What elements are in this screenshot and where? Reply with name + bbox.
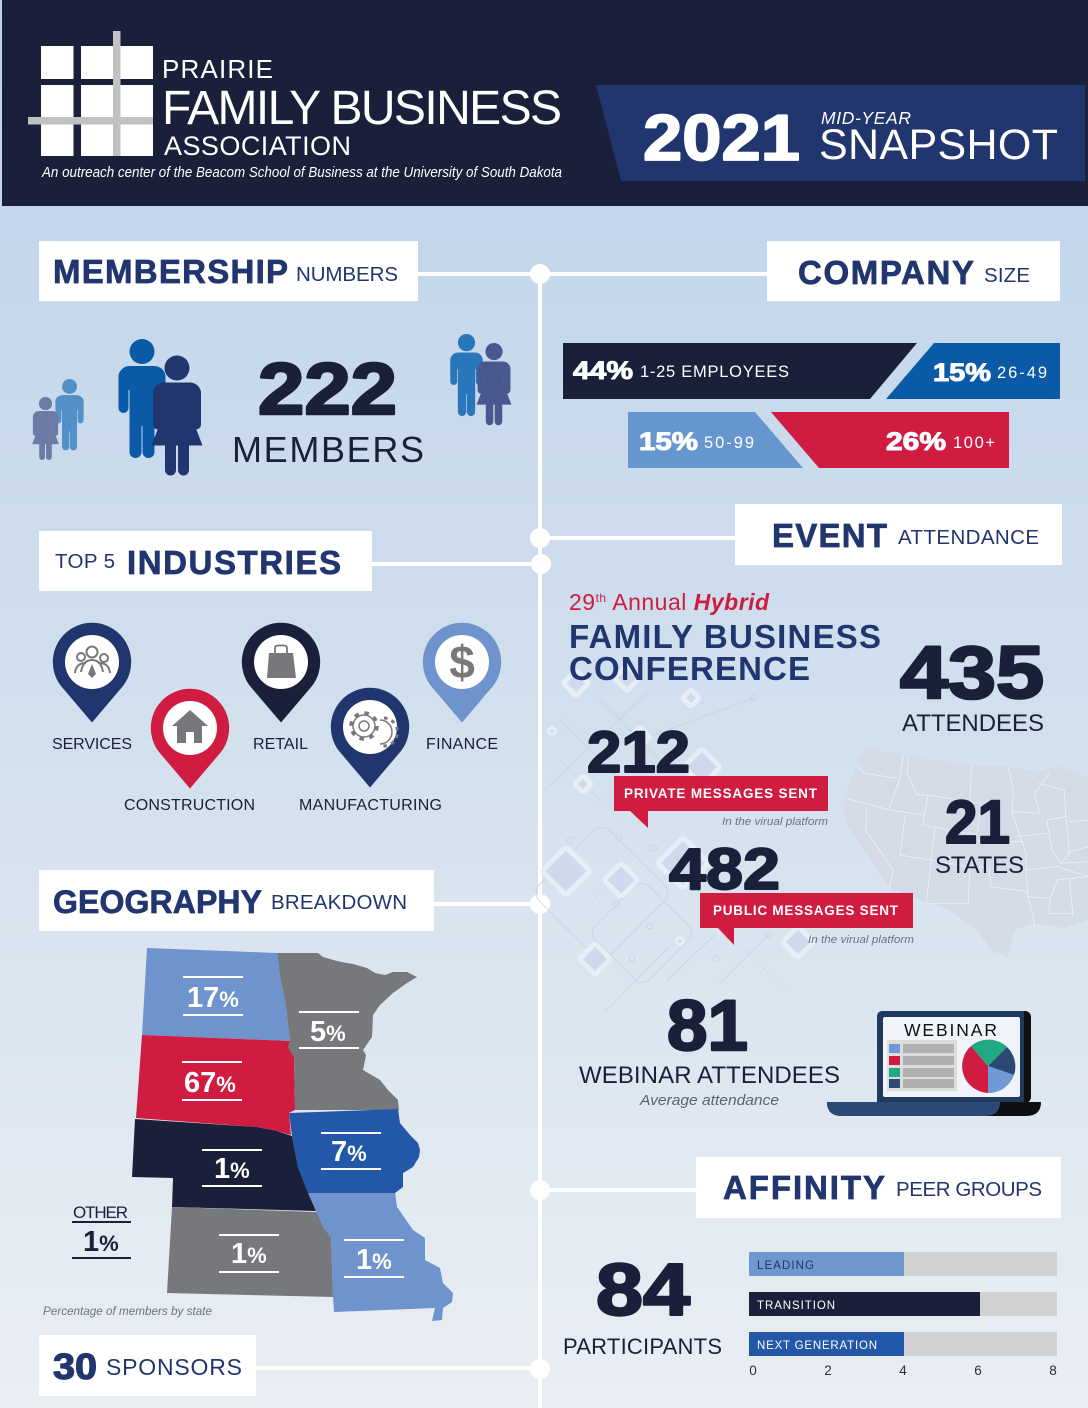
state: Missouri xyxy=(308,1192,453,1321)
bar: 50-99 employees: 50-99 xyxy=(704,434,754,452)
stat: public messages: In the virual platform xyxy=(808,934,914,946)
conference title xyxy=(569,589,881,687)
stat: webinar attendees: 81 xyxy=(667,987,748,1066)
heading: geography breakdown xyxy=(39,870,434,931)
state: Missouri: 1% xyxy=(356,1244,392,1276)
stat: public messages xyxy=(669,837,914,946)
bar: 1-25 employees xyxy=(563,343,917,399)
state: Iowa: 7% xyxy=(331,1136,367,1168)
state: Kansas xyxy=(167,1207,333,1297)
members count xyxy=(232,349,424,470)
bar chart: affinity groups: 2 xyxy=(824,1363,832,1378)
icon: services pin: SERVICES xyxy=(52,736,132,753)
map caption: Percentage of members by state xyxy=(43,1306,212,1318)
stat: webinar attendees xyxy=(579,987,840,1109)
attendee count xyxy=(900,631,1044,737)
state: North Dakota: 17% xyxy=(187,982,239,1014)
state: South Dakota: 67% xyxy=(184,1067,236,1099)
states stat: 21 xyxy=(945,788,1010,856)
icon: finance pin: $ xyxy=(449,636,475,688)
bar chart: affinity groups: LEADING xyxy=(757,1260,814,1272)
conference title: FAMILY BUSINESS xyxy=(569,618,881,655)
bar: 100+ employees: 26% xyxy=(886,428,946,456)
snapshot banner: SNAPSHOT xyxy=(819,121,1058,169)
bar: 1-25 employees: 44% xyxy=(573,357,633,385)
bar chart: affinity groups: TRANSITION xyxy=(757,1300,835,1312)
icon: medium family right xyxy=(450,334,511,425)
state: Minnesota xyxy=(277,953,417,1110)
heading: top 5 industries xyxy=(39,531,372,591)
bar chart: affinity groups: NEXT GENERATION xyxy=(757,1340,877,1352)
members panel xyxy=(32,334,511,476)
heading: affinity peer groups: PEER GROUPS xyxy=(896,1178,1042,1201)
heading: geography breakdown: BREAKDOWN xyxy=(271,891,407,914)
bar: 26-49 employees: 15% xyxy=(933,359,991,387)
bar: 50-99 employees xyxy=(628,412,803,468)
heading: event attendance xyxy=(735,504,1062,565)
stat: private messages xyxy=(587,720,828,828)
icon: webinar laptop: WEBINAR xyxy=(904,1020,997,1040)
bar chart: affinity groups: 8 xyxy=(1049,1363,1057,1378)
members count: MEMBERS xyxy=(232,429,424,470)
conference title: th xyxy=(596,591,607,605)
icon: small family left xyxy=(32,379,84,460)
stat: public messages: 482 xyxy=(669,837,780,902)
stat: participants xyxy=(563,1250,722,1359)
logo mark xyxy=(28,31,153,156)
sponsors box xyxy=(39,1335,256,1396)
heading: top 5 industries: TOP 5 xyxy=(55,550,115,573)
bar: 26-49 employees xyxy=(886,343,1060,399)
state: North Dakota xyxy=(142,948,290,1041)
bar chart: affinity groups: 4 xyxy=(899,1363,907,1378)
bar chart: affinity groups: 0 xyxy=(749,1363,757,1378)
heading: company size xyxy=(767,241,1060,301)
map: states by member share xyxy=(132,948,453,1321)
snapshot banner xyxy=(596,85,1085,181)
icon: finance pin xyxy=(423,623,501,753)
icon: manufacturing pin xyxy=(299,688,442,814)
organisation name: ASSOCIATION xyxy=(164,131,351,161)
bar: 50-99 employees: 15% xyxy=(639,428,698,456)
heading: membership numbers: MEMBERSHIP xyxy=(53,253,288,290)
states stat: STATES xyxy=(935,852,1024,879)
snapshot banner: MID-YEAR xyxy=(821,108,911,128)
stat: private messages: PRIVATE MESSAGES SENT xyxy=(624,786,818,801)
icon: finance pin: FINANCE xyxy=(426,736,498,753)
industries pins xyxy=(52,623,501,814)
heading: geography breakdown: GEOGRAPHY xyxy=(53,884,262,920)
organisation name: An outreach center of the Beacom School of Business at the University of South Dakota xyxy=(41,164,562,181)
conference title: Annual xyxy=(607,589,694,615)
attendee count: ATTENDEES xyxy=(902,710,1044,737)
heading: company size: SIZE xyxy=(984,264,1030,287)
header band xyxy=(2,0,1088,206)
heading: affinity peer groups: AFFINITY xyxy=(723,1169,885,1206)
stat: participants: PARTICIPANTS xyxy=(563,1334,722,1359)
heading: top 5 industries: INDUSTRIES xyxy=(127,544,341,581)
conference title: Hybrid xyxy=(694,589,770,615)
icon: retail pin xyxy=(242,623,320,753)
members count: 222 xyxy=(258,349,397,430)
other states callout: OTHER xyxy=(73,1203,128,1222)
conference title: CONFERENCE xyxy=(569,650,810,687)
other states callout: 1% xyxy=(83,1226,119,1258)
stat: webinar attendees: WEBINAR ATTENDEES xyxy=(579,1062,840,1089)
state: Kansas: 1% xyxy=(231,1238,267,1270)
organisation name: PRAIRIE xyxy=(162,54,273,84)
stat: webinar attendees: Average attendance xyxy=(639,1092,779,1109)
stat: private messages: In the virual platform xyxy=(722,816,828,828)
snapshot banner: 2021 xyxy=(643,101,800,174)
map: United States xyxy=(842,748,1088,957)
decorative conference circuit background xyxy=(531,665,814,1012)
state: Iowa xyxy=(289,1109,420,1193)
other states callout xyxy=(72,1203,131,1259)
heading: affinity peer groups xyxy=(696,1157,1061,1218)
company size bars xyxy=(563,343,1060,468)
state: Minnesota: 5% xyxy=(310,1016,346,1048)
stat: participants: 84 xyxy=(596,1250,690,1331)
icon: retail pin: RETAIL xyxy=(253,736,308,753)
bar chart: affinity groups xyxy=(749,1252,1057,1378)
state: South Dakota xyxy=(136,1035,295,1135)
icon: webinar laptop xyxy=(827,1011,1041,1116)
organisation name: FAMILY BUSINESS xyxy=(162,82,562,135)
heading: membership numbers: NUMBERS xyxy=(296,263,398,286)
heading: membership numbers xyxy=(39,241,418,301)
conference title: 29 xyxy=(569,589,596,615)
icon: construction pin xyxy=(124,689,255,814)
stat: private messages: 212 xyxy=(587,720,690,785)
bar: 100+ employees xyxy=(771,412,1009,468)
stat: public messages: PUBLIC MESSAGES SENT xyxy=(713,903,899,918)
state: Nebraska xyxy=(132,1119,316,1211)
sponsors box: 30 xyxy=(53,1346,97,1387)
sponsors box: SPONSORS xyxy=(106,1354,242,1380)
icon: large family centre xyxy=(118,339,202,476)
US map with states stat xyxy=(842,748,1088,957)
connector lines and nodes xyxy=(256,264,767,1408)
icon: construction pin: CONSTRUCTION xyxy=(124,797,255,814)
heading: company size: COMPANY xyxy=(798,254,974,291)
icon: services pin xyxy=(52,623,132,753)
state: Nebraska: 1% xyxy=(214,1153,250,1185)
organisation name xyxy=(41,54,562,181)
heading: event attendance: ATTENDANCE xyxy=(898,526,1039,549)
bar: 26-49 employees: 26-49 xyxy=(997,364,1047,382)
bar: 100+ employees: 100+ xyxy=(953,434,995,452)
heading: event attendance: EVENT xyxy=(772,517,887,554)
icon: manufacturing pin: MANUFACTURING xyxy=(299,797,442,814)
attendee count: 435 xyxy=(900,631,1044,714)
bar: 1-25 employees: 1-25 EMPLOYEES xyxy=(640,363,789,381)
states stat xyxy=(935,788,1024,879)
bar chart: affinity groups: 6 xyxy=(974,1363,982,1378)
